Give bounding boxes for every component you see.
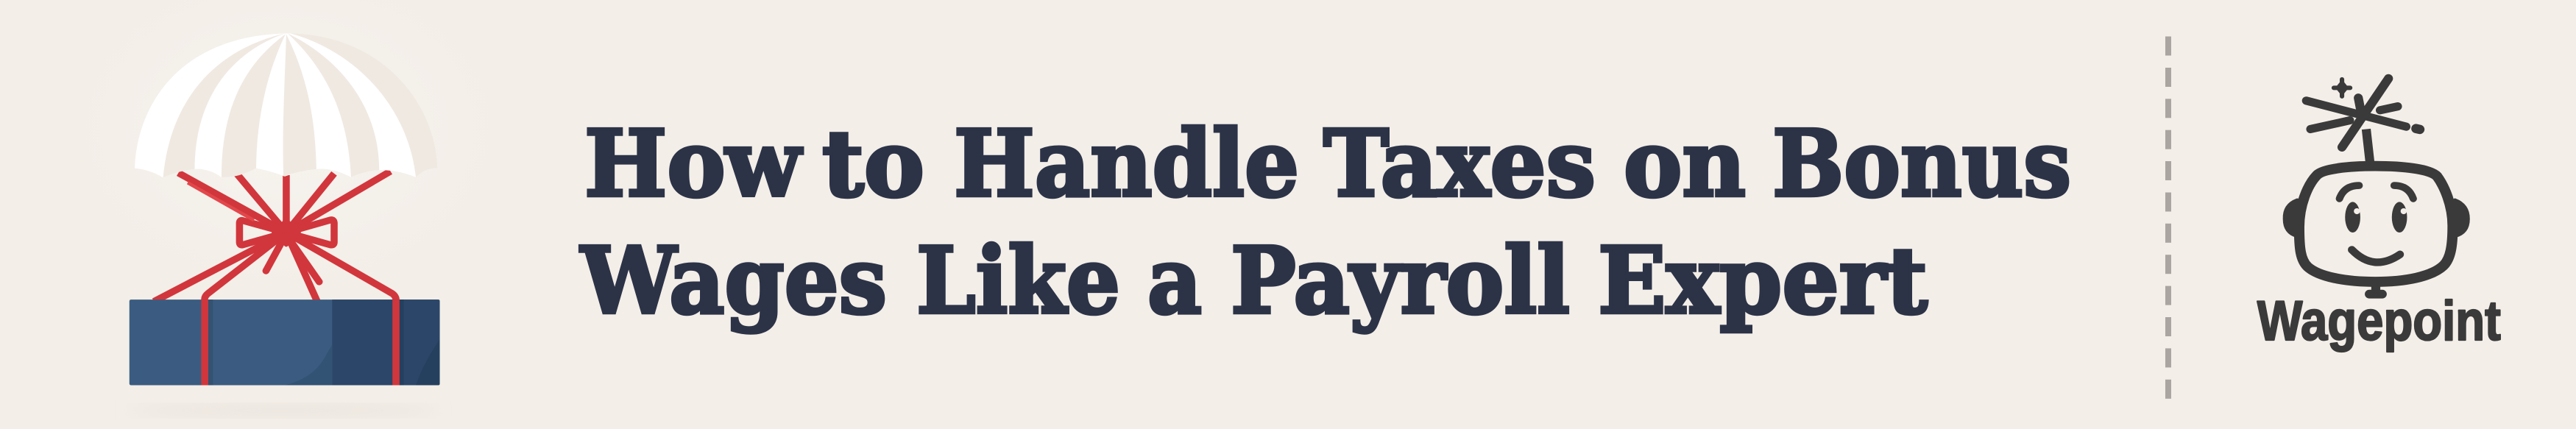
illustration: parachute gift: [130, 33, 440, 385]
title line 1: to: [822, 110, 924, 218]
stand: [2369, 286, 2382, 294]
title line 1: Handle: [954, 110, 1299, 218]
title line 2: a: [1147, 227, 1202, 335]
ears: [2285, 200, 2297, 235]
icon: spark: [2306, 79, 2420, 147]
title line 1: How: [584, 110, 803, 218]
ropes and bow: [154, 171, 396, 385]
logo: Wagepoint: [2257, 79, 2501, 352]
title line 1: [584, 110, 2071, 218]
dashed divider: [2165, 37, 2171, 399]
title line 2: Like: [916, 227, 1120, 335]
title: [579, 110, 2071, 335]
parachute canopy: [135, 33, 437, 177]
title line 1: Bonus: [1772, 110, 2071, 218]
title line 2: Payroll: [1231, 227, 1570, 335]
antenna: [2366, 129, 2370, 164]
smile: [2352, 249, 2400, 262]
title line 1: Taxes: [1323, 110, 1596, 218]
eyebrows: [2340, 185, 2413, 199]
eyes: [2345, 202, 2360, 233]
title line 2: Expert: [1598, 227, 1928, 335]
title line 2: Wages: [579, 227, 887, 335]
head: [2299, 166, 2452, 282]
title line 2: [579, 227, 1928, 335]
icon: robot mascot: [2285, 79, 2468, 294]
gift box: [130, 299, 440, 385]
wordmark: Wagepoint: [2257, 290, 2501, 352]
title line 1: on: [1624, 110, 1746, 218]
